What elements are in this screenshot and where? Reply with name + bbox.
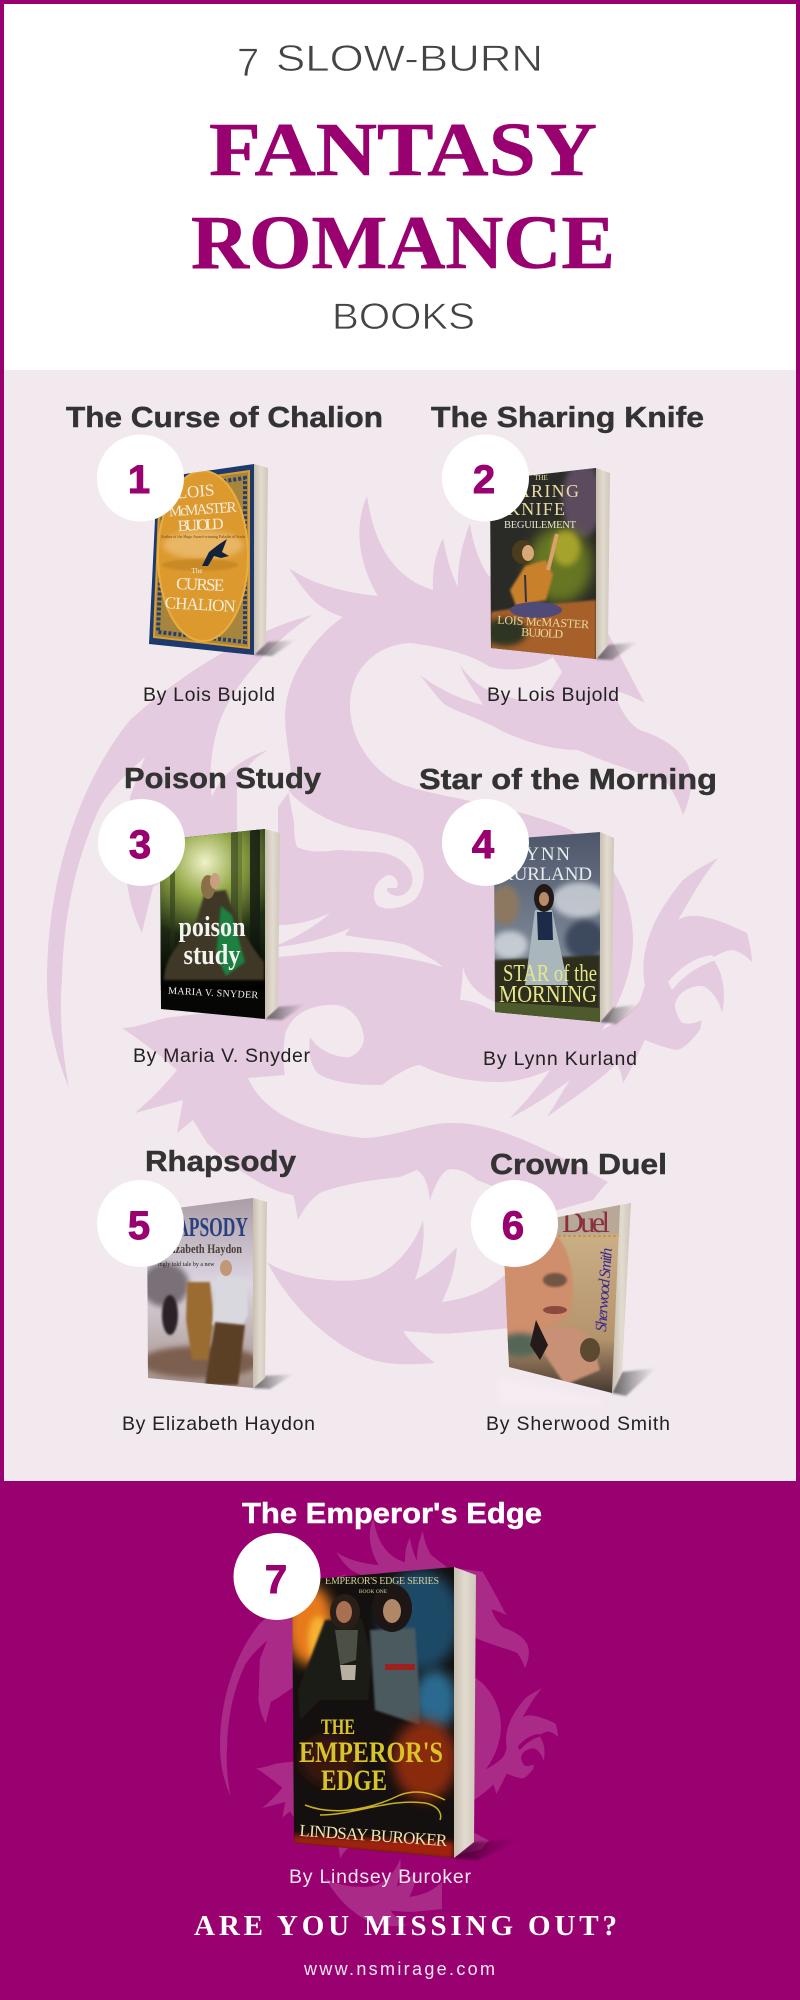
website: www.nsmirage.com [303, 1959, 495, 1979]
book cover [140, 1195, 294, 1393]
title: Rhapsody [145, 1146, 296, 1178]
book cover: ingly told tale by a new [158, 1262, 215, 1268]
author: By Sherwood Smith [486, 1413, 670, 1435]
number badge: 4 [472, 823, 495, 867]
book cover: BUJOLD [177, 516, 224, 535]
book cover: Author of the Hugo Award-winning Paladin of Souls [161, 534, 246, 539]
book cover: EMPEROR'S EDGE SERIES [325, 1576, 439, 1587]
author: By Lois Bujold [487, 684, 619, 706]
book cover: STAR of the [503, 961, 597, 987]
book cover: LOIS McMASTER [497, 613, 590, 631]
book cover: LINDSAY BUROKER [299, 1821, 449, 1850]
title line: 7 slow-burn: 7 [237, 41, 259, 85]
book cover: SHARING [491, 481, 579, 501]
author: By Maria V. Snyder [133, 1045, 310, 1067]
header panel [4, 4, 796, 370]
title: romance: ROMANCE [191, 201, 615, 285]
number badge: 2 [473, 458, 495, 502]
title: Crown Duel [490, 1149, 667, 1181]
title: fantasy: FANTASY [209, 108, 597, 192]
book cover: KURLAND [500, 864, 592, 885]
author: By Lynn Kurland [483, 1048, 637, 1070]
number badge [97, 434, 184, 522]
book 7 [234, 1498, 542, 1888]
panel: book list background [4, 370, 796, 1481]
number badge [442, 434, 529, 522]
footer dragon watermark [220, 1518, 558, 1926]
number badge [98, 799, 185, 886]
book 5 [97, 1146, 315, 1435]
book cover: Duel [562, 1206, 610, 1239]
title: The Emperor's Edge [242, 1498, 542, 1530]
title: Star of the Morning [419, 764, 717, 796]
number badge [442, 799, 529, 886]
number badge: 1 [128, 458, 150, 502]
book cover: LOIS [176, 480, 215, 503]
book cover: LYNN [514, 844, 570, 865]
book cover: CHALION [164, 593, 236, 616]
book cover: Elizabeth Haydon [163, 1241, 243, 1256]
book cover: poison [178, 911, 246, 943]
book cover: CURSE [176, 574, 225, 595]
panel: purple footer [0, 1482, 800, 2000]
number badge: 3 [129, 823, 151, 867]
title line: 7 slow-burn [237, 38, 543, 85]
book cover: RHAPSODY [150, 1212, 248, 1242]
title line: books: BOOKS [332, 296, 475, 337]
number badge [97, 1180, 184, 1267]
book cover: KNIFE [507, 499, 565, 519]
book cover: MARIA V. SNYDER [168, 986, 259, 1001]
book cover: EMPEROR'S [299, 1736, 443, 1769]
book cover [490, 468, 634, 662]
book cover [145, 460, 296, 660]
book cover: BOOK ONE [359, 1589, 388, 1595]
author: By Lois Bujold [143, 684, 275, 706]
call to action: ARE YOU MISSING OUT? [194, 1910, 617, 1942]
title: The Sharing Knife [431, 402, 704, 434]
title line: 7 slow-burn: SLOW-BURN [276, 38, 543, 79]
book cover: THE [321, 1714, 355, 1739]
title: The Curse of Chalion [66, 402, 383, 434]
book 1 [66, 402, 383, 706]
book cover [155, 825, 306, 1025]
number badge [471, 1180, 558, 1267]
book cover [504, 1203, 652, 1398]
title: Poison Study [124, 763, 321, 795]
book cover: MORNING [499, 982, 597, 1008]
book cover: BUJOLD [521, 625, 564, 641]
book cover: McMASTER [168, 500, 237, 520]
number badge: 7 [265, 1558, 287, 1602]
book cover: THE [534, 474, 548, 482]
number badge: 6 [502, 1204, 524, 1248]
book cover [490, 828, 640, 1028]
book 3 [98, 763, 321, 1067]
book 4 [419, 764, 717, 1070]
book cover: Sherwood Smith [593, 1247, 616, 1332]
number badge: 5 [128, 1204, 150, 1248]
book 2 [431, 402, 704, 706]
book cover [286, 1562, 518, 1862]
author: By Lindsey Buroker [289, 1866, 472, 1888]
book cover: study [184, 939, 241, 971]
dragon watermark [47, 496, 752, 1364]
author: By Elizabeth Haydon [122, 1413, 315, 1435]
book 6 [471, 1149, 670, 1435]
book cover: BEGUILEMENT [504, 520, 577, 531]
number badge [234, 1533, 320, 1620]
book cover: The [192, 567, 202, 575]
book cover: EDGE [321, 1764, 387, 1797]
